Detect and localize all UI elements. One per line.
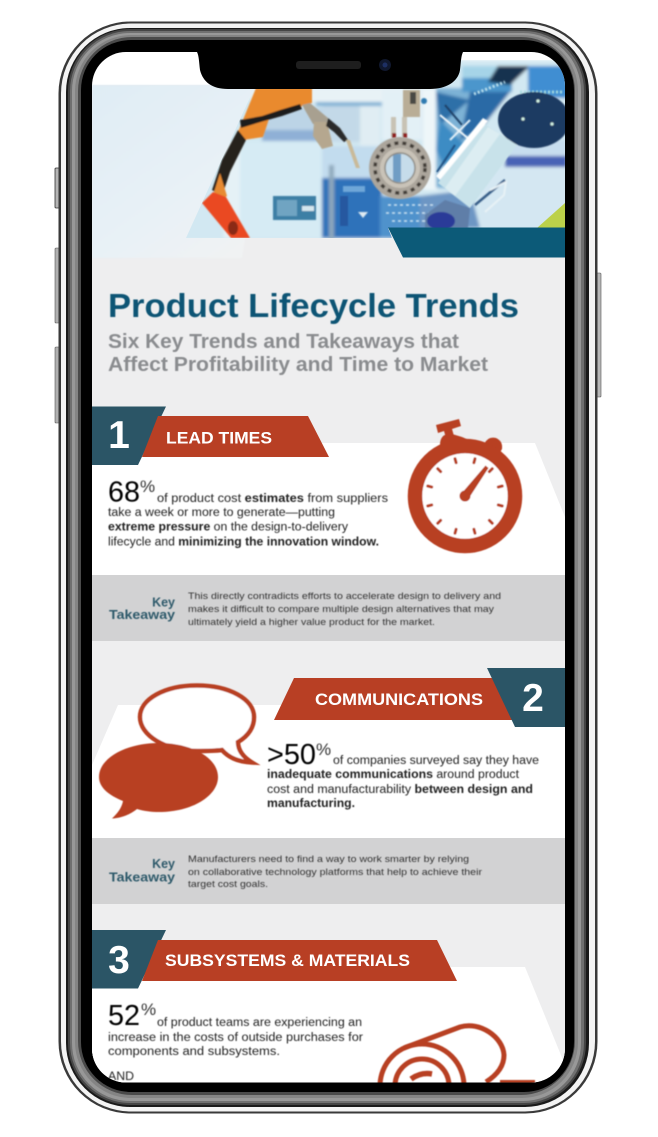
dark lower arm xyxy=(212,130,246,196)
icon: speech bubbles xyxy=(99,686,254,818)
teal band xyxy=(388,228,565,258)
panel: key takeaway 2: Key xyxy=(152,857,175,871)
badge number 1 xyxy=(92,406,166,465)
badge number 1: 1 xyxy=(108,414,130,457)
stat text: 68%: take a week or more to generate—putting xyxy=(108,507,335,519)
speaker xyxy=(296,61,361,69)
teal-adjacent green triangle xyxy=(537,203,565,228)
heading banner: communications xyxy=(274,678,513,720)
subtitle: Six Key Trends and Takeaways that xyxy=(108,331,459,353)
stat text: 52%: components and subsystems. xyxy=(108,1046,280,1058)
stat text: 52%: AND xyxy=(108,1071,134,1083)
red lower arm xyxy=(202,192,250,238)
speckled lower machinery xyxy=(386,205,436,221)
heading banner: subsystems and materials xyxy=(142,940,457,981)
icon: material roll xyxy=(376,1022,536,1082)
stat text: 68%: % xyxy=(140,477,155,496)
panel: key takeaway 1: Key xyxy=(152,596,175,610)
badge number 3: 3 xyxy=(108,939,130,982)
stat text: 68%: of product cost estimates from suppliers xyxy=(157,493,388,505)
stat text: >50%: >50 xyxy=(267,739,316,771)
mixed blue machinery lines xyxy=(437,82,563,212)
panel: key takeaway 2: on collaborative technology platforms that help to achieve their xyxy=(188,867,482,878)
title: Product Lifecycle Trends xyxy=(108,288,519,325)
stat text: >50%: cost and manufacturability between design and xyxy=(267,784,533,796)
header photo: robot arm and bearing xyxy=(180,60,570,240)
heading banner: lead times xyxy=(142,416,329,457)
header light blue panel xyxy=(92,84,252,206)
badge number 2 xyxy=(487,668,565,727)
panel: key takeaway 2: Takeaway xyxy=(109,870,175,884)
phone body xyxy=(55,22,601,1114)
stat text: 68%: extreme pressure on the design-to-delivery xyxy=(108,522,348,534)
stat text: 52%: % xyxy=(141,1000,156,1019)
phone screen xyxy=(92,52,570,1128)
gripper top xyxy=(403,90,420,117)
panel: key takeaway 1: This directly contradicts efforts to accelerate design to delivery and xyxy=(188,591,501,602)
stat text: >50%: % xyxy=(316,740,331,759)
subtitle xyxy=(108,331,488,376)
panel: section 1 lead times xyxy=(92,406,565,575)
robot wrist and gripper xyxy=(302,103,328,124)
heading banner: subsystems and materials: SUBSYSTEMS & MATERIALS xyxy=(165,952,410,970)
stat text: 52%: 52 xyxy=(108,1000,140,1032)
bearing xyxy=(369,137,431,199)
panel: key takeaway 1: ultimately yield a higher value product for the market. xyxy=(188,617,435,628)
side buttons xyxy=(55,168,601,423)
heading banner: communications: COMMUNICATIONS xyxy=(315,691,483,709)
blue machine details xyxy=(358,212,368,218)
panel: key takeaway 2: target cost goals. xyxy=(188,879,268,890)
panel: section 3 subsystems and materials xyxy=(92,930,563,1082)
panel: key takeaway 1: makes it difficult to compare multiple design alternatives that may xyxy=(188,604,494,615)
stat text: 52% xyxy=(108,1000,363,1083)
icon: stopwatch xyxy=(415,419,515,546)
dark disc xyxy=(498,92,570,148)
stat text: >50%: inadequate communications around product xyxy=(267,769,520,781)
stat text: >50% xyxy=(267,739,539,810)
subtitle: Affect Profitability and Time to Market xyxy=(108,354,488,376)
panel: key takeaway 2 xyxy=(92,838,565,904)
stat text: 68% xyxy=(108,476,388,548)
small screen xyxy=(273,196,316,220)
panel: key takeaway 1 xyxy=(92,575,565,641)
panel: key takeaway 2: Manufacturers need to find a way to work smarter by relying xyxy=(188,854,469,865)
badge number 3 xyxy=(92,930,166,988)
lower gear and purple hub xyxy=(425,200,470,228)
badge number 2: 2 xyxy=(522,677,544,720)
phone notch xyxy=(190,46,470,89)
stat text: 68%: lifecycle and minimizing the innovation window. xyxy=(108,536,379,548)
stat text: >50%: of companies surveyed say they have xyxy=(333,755,539,767)
panel: key takeaway 1: Takeaway xyxy=(109,608,175,622)
white diagonal arm xyxy=(438,123,517,208)
panel: section 2 communications xyxy=(92,668,565,838)
orange upper arm xyxy=(238,88,312,140)
heading banner: lead times: LEAD TIMES xyxy=(166,430,272,448)
stat text: >50%: manufacturing. xyxy=(267,798,355,810)
stat text: 68%: 68 xyxy=(108,476,140,508)
stat text: 52%: increase in the costs of outside purchases for xyxy=(108,1032,363,1044)
stat text: 52%: of product teams are experiencing an xyxy=(157,1017,362,1029)
camera xyxy=(379,59,391,71)
